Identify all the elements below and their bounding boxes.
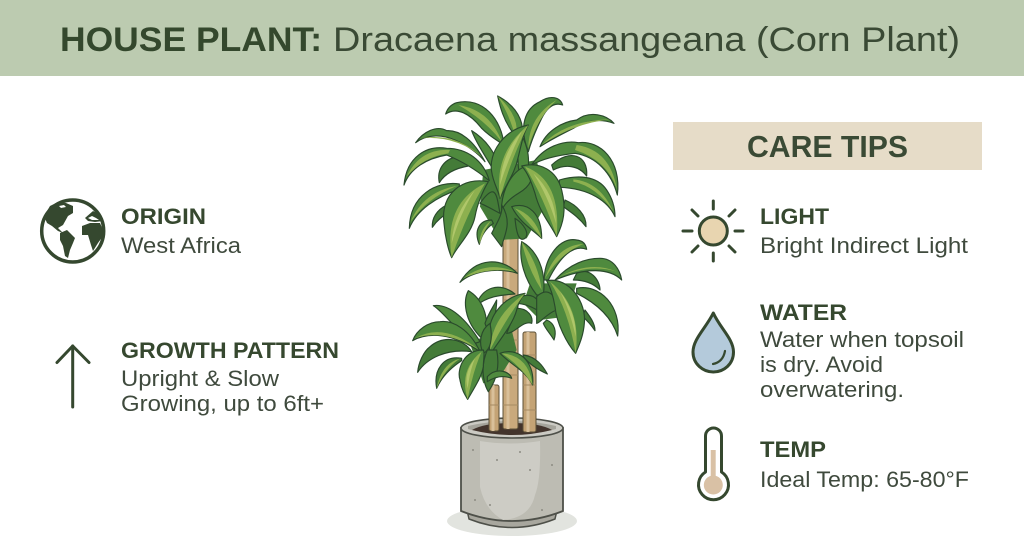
label: WATER: [760, 300, 847, 325]
origin block: [42, 200, 242, 262]
trunks: [489, 235, 536, 432]
value: is dry. Avoid: [760, 352, 883, 377]
pot shadow: [447, 506, 577, 536]
value: Growing, up to 6ft+: [121, 391, 324, 416]
value: Water when topsoil: [760, 327, 964, 352]
top crown: [404, 96, 618, 258]
label: LIGHT: [760, 204, 830, 229]
value: overwatering.: [760, 377, 904, 402]
value: West Africa: [121, 233, 242, 258]
icon: water drop: [693, 313, 734, 372]
label: GROWTH PATTERN: [121, 338, 339, 363]
value: [121, 366, 324, 416]
icon: up arrow: [57, 346, 89, 407]
label: TEMP: [760, 437, 826, 462]
value: Ideal Temp: 65-80°F: [760, 467, 969, 492]
concrete pot: [461, 418, 563, 528]
middle crown: [460, 240, 622, 353]
icon: sun: [683, 201, 743, 261]
light tip: [683, 201, 968, 261]
title: HOUSE PLANT:: [60, 21, 322, 59]
temp tip: [698, 428, 969, 500]
growth pattern block: [57, 338, 339, 416]
care tips heading box: [673, 122, 982, 170]
header banner: [0, 0, 1024, 76]
leaves: coordinates in a 3x grid: [404, 96, 622, 399]
value: Upright & Slow: [121, 366, 279, 391]
care tips heading box: CARE TIPS: [747, 129, 908, 164]
title: Dracaena massangeana (Corn Plant): [333, 21, 960, 59]
plant illustration: [404, 96, 622, 536]
value: Bright Indirect Light: [760, 233, 968, 258]
label: ORIGIN: [121, 204, 206, 229]
icon: thermometer: [698, 428, 729, 500]
value: [760, 327, 964, 402]
water tip: [693, 300, 964, 402]
icon: globe: [42, 200, 104, 262]
lower crown: [413, 291, 547, 399]
